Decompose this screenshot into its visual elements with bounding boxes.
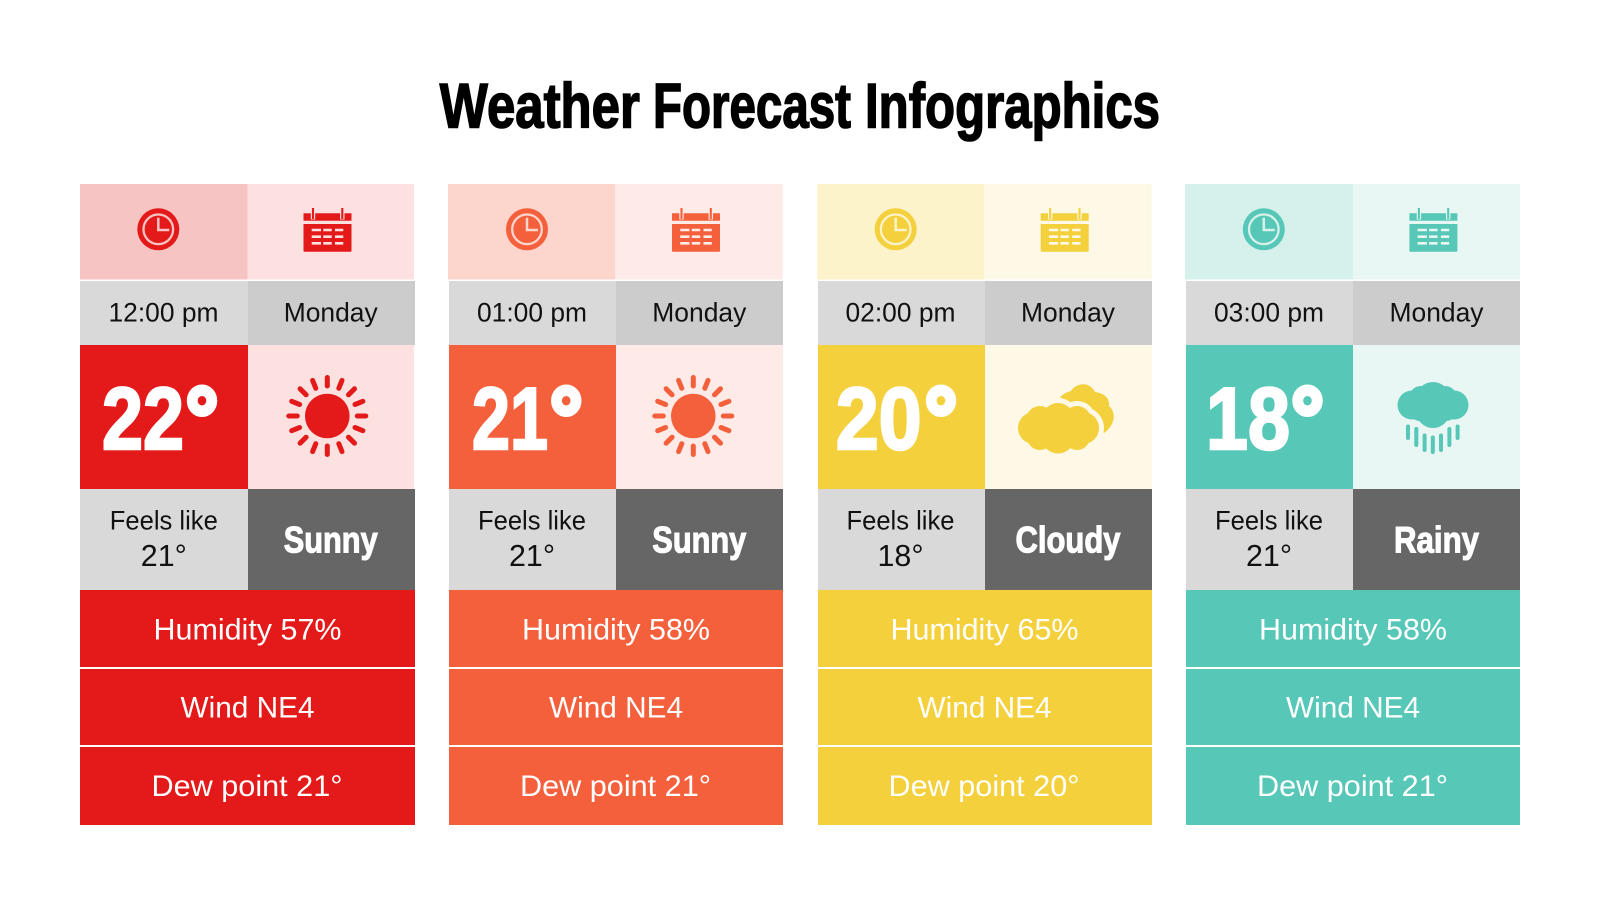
- humidity row: [80, 590, 415, 667]
- day label: Monday: [1021, 298, 1115, 328]
- condition: Cloudy: [1016, 520, 1121, 561]
- icon: sun: [655, 378, 732, 454]
- calendar cell background: [984, 184, 1152, 280]
- feels like cell: [1186, 489, 1353, 590]
- panel: 03:00 pm rainy: [1185, 184, 1520, 825]
- calendar cell background: [1353, 184, 1520, 280]
- time label: 03:00 pm: [1214, 298, 1324, 328]
- icon: clock: [1243, 208, 1285, 250]
- weather icon cell: [616, 345, 783, 489]
- condition: Sunny: [652, 520, 747, 561]
- temperature cell: [449, 345, 616, 489]
- clock cell background: [80, 184, 248, 280]
- feels like label: Feels like: [110, 505, 218, 535]
- temperature: °: [924, 370, 958, 470]
- day label: Monday: [652, 298, 747, 328]
- dew point row: [80, 747, 415, 825]
- condition cell: [248, 489, 415, 590]
- dew point row: [449, 747, 783, 825]
- dew point label: Dew point 21°: [1257, 770, 1448, 803]
- clock cell background: [1185, 184, 1353, 280]
- day cell: [985, 281, 1152, 345]
- time cell: [1186, 281, 1353, 345]
- temperature cell: [80, 345, 248, 489]
- weather icon cell: [1353, 345, 1520, 489]
- humidity label: Humidity 58%: [1259, 613, 1447, 646]
- icon: cloud: [1018, 384, 1114, 454]
- day label: Monday: [284, 298, 378, 328]
- icon: clock: [506, 208, 548, 250]
- temperature: °: [186, 370, 218, 470]
- wind row: [818, 669, 1152, 745]
- temperature: 21: [472, 369, 548, 468]
- wind row: [80, 669, 415, 745]
- condition: Sunny: [284, 520, 378, 561]
- panel: 12:00 pm sunny: [80, 184, 415, 825]
- feels like value: 18°: [878, 538, 924, 573]
- icon: calendar: [672, 208, 720, 252]
- humidity label: Humidity 58%: [522, 613, 710, 646]
- panel: 02:00 pm cloudy: [817, 184, 1152, 825]
- temperature: °: [1291, 370, 1324, 470]
- time cell: [80, 281, 248, 345]
- condition cell: [616, 489, 783, 590]
- feels like label: Feels like: [1215, 505, 1323, 535]
- wind label: Wind NE4: [549, 691, 683, 724]
- humidity row: [818, 590, 1152, 667]
- icon: clock: [875, 208, 917, 250]
- weather icon cell: [985, 345, 1152, 489]
- time cell: [449, 281, 616, 345]
- title: [440, 72, 1160, 142]
- time cell: [818, 281, 985, 345]
- icon: calendar: [1409, 208, 1457, 252]
- feels like label: Feels like: [478, 505, 586, 535]
- wind row: [449, 669, 783, 745]
- wind row: [1186, 669, 1520, 745]
- wind label: Wind NE4: [180, 691, 314, 724]
- feels like value: 21°: [1246, 538, 1292, 573]
- panel: 01:00 pm sunny: [448, 184, 783, 825]
- temperature: 18: [1206, 369, 1290, 468]
- dew point row: [1186, 747, 1520, 825]
- day cell: [248, 281, 415, 345]
- calendar cell background: [248, 184, 414, 280]
- icon: clock: [137, 208, 179, 250]
- feels like label: Feels like: [846, 505, 954, 535]
- title: Weather: [440, 72, 640, 142]
- title: Forecast: [653, 72, 851, 142]
- condition cell: [985, 489, 1152, 590]
- title: Infographics: [865, 72, 1160, 142]
- wind label: Wind NE4: [918, 691, 1052, 724]
- temperature: °: [550, 370, 583, 470]
- temperature cell: [1186, 345, 1353, 489]
- icon: sun: [289, 378, 366, 454]
- weather icon cell: [248, 345, 414, 489]
- feels like cell: [818, 489, 985, 590]
- day label: Monday: [1390, 298, 1484, 328]
- humidity label: Humidity 65%: [890, 613, 1078, 646]
- time label: 12:00 pm: [108, 298, 218, 328]
- clock cell background: [817, 184, 984, 280]
- day cell: [616, 281, 783, 345]
- condition: Rainy: [1394, 520, 1479, 561]
- humidity row: [449, 590, 783, 667]
- time label: 02:00 pm: [846, 298, 956, 328]
- feels like cell: [80, 489, 248, 590]
- icon: calendar: [304, 208, 352, 252]
- dew point label: Dew point 21°: [152, 770, 342, 803]
- feels like value: 21°: [509, 538, 555, 573]
- time label: 01:00 pm: [477, 298, 587, 328]
- temperature: 22: [102, 369, 184, 468]
- icon: calendar: [1041, 208, 1089, 252]
- icon: rain cloud: [1398, 382, 1468, 452]
- wind label: Wind NE4: [1286, 691, 1420, 724]
- dew point label: Dew point 21°: [520, 770, 711, 803]
- condition cell: [1353, 489, 1520, 590]
- day cell: [1353, 281, 1520, 345]
- dew point row: [818, 747, 1152, 825]
- dew point label: Dew point 20°: [888, 770, 1080, 803]
- temperature cell: [818, 345, 985, 489]
- calendar cell background: [615, 184, 783, 280]
- feels like cell: [449, 489, 616, 590]
- feels like value: 21°: [141, 538, 187, 573]
- humidity label: Humidity 57%: [154, 613, 342, 646]
- clock cell background: [448, 184, 615, 280]
- humidity row: [1186, 590, 1520, 667]
- temperature: 20: [836, 369, 922, 468]
